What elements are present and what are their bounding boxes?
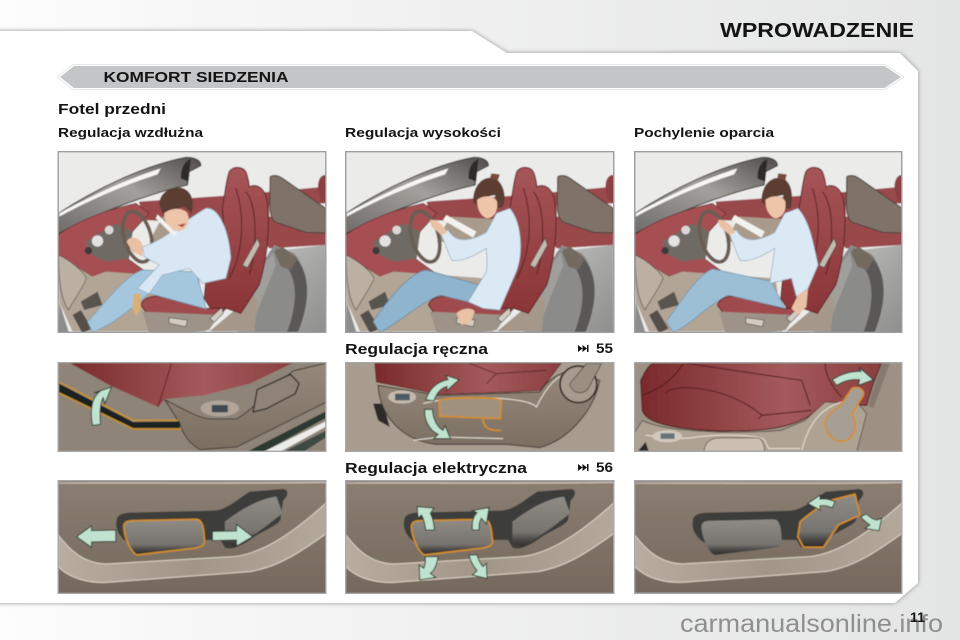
title: WPROWADZENIE (720, 20, 914, 42)
illustration: driver lowering hand to seat height lever (345, 151, 614, 333)
watermark: carmanualsonline.info (680, 610, 943, 638)
page number: 11 (910, 609, 925, 625)
detail: electric switch forward and back (58, 480, 326, 594)
arrows: slide (76, 524, 252, 547)
column heading 1: Regulacja wzdłużna (58, 126, 204, 140)
banner heading: KOMFORT SIEDZENIA (104, 69, 289, 86)
page reference 56 (578, 460, 614, 475)
column heading 3: Pochylenie oparcia (634, 126, 775, 140)
illustration: driver reaching seat-back recline control (634, 151, 902, 333)
column heading 2: Regulacja wysokości (345, 126, 501, 140)
page reference 55: 55 (596, 341, 614, 356)
arrows: recline switch (808, 495, 882, 531)
detail: recline knob on seat side (634, 362, 902, 452)
detail: height lever on seat side (345, 362, 614, 452)
heading: front seat: Fotel przedni (58, 101, 166, 118)
electric adjustment heading: Regulacja elektryczna (345, 460, 528, 477)
arrows: four-way (417, 507, 489, 580)
arrow: recline (832, 367, 873, 385)
detail: electric switch recline (634, 480, 902, 594)
arrow: lift lever (91, 387, 112, 425)
detail: lever under seat front (58, 362, 326, 452)
detail: electric switch tilt and height (345, 480, 614, 594)
arrows: pump lever up and down (425, 375, 459, 439)
section banner (57, 64, 904, 90)
illustration: driver leaning to reach forward adjustment (58, 151, 326, 333)
manual adjustment heading: Regulacja ręczna (345, 341, 489, 358)
page reference 56: 56 (596, 460, 614, 475)
page reference 55 (578, 341, 614, 356)
